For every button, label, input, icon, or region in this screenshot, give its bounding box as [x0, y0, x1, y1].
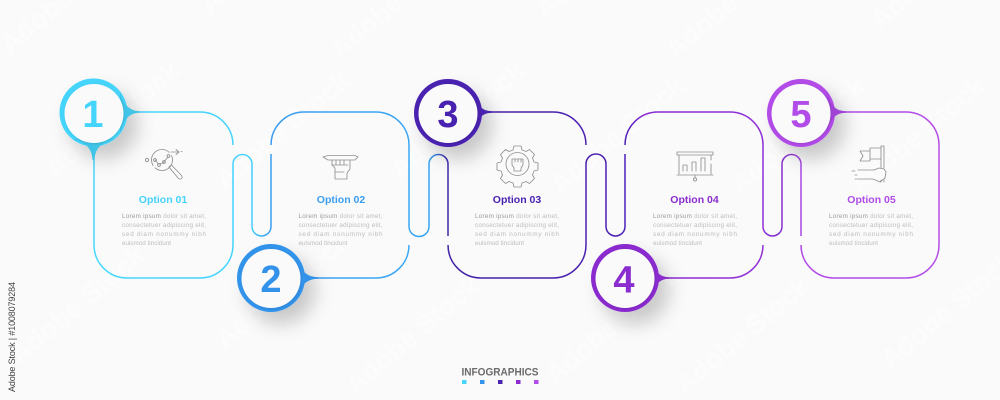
connector: 2 to 3 [409, 155, 448, 236]
panel: option 05 [801, 112, 939, 278]
footer title: INFOGRAPHICS [462, 366, 538, 378]
text block: option 05: euismod tincidunt [829, 240, 878, 247]
heading: option 01: Option 01 [139, 194, 187, 206]
icon: magnifier over chart [145, 150, 182, 179]
panel: option 03 [448, 112, 586, 278]
text block: option 04: sed diam nonummy nibh [653, 231, 737, 238]
watermark pattern: Adobe Stock [385, 55, 531, 185]
badge: number 1: 1 [82, 94, 104, 136]
badge: number 2: 2 [260, 259, 282, 301]
side stock id text: Adobe Stock | #1008079284 [7, 282, 17, 392]
badge: number 5: 5 [790, 94, 812, 136]
heading: option 02: Option 02 [317, 194, 365, 206]
text block: option 05: consectetuer adipiscing elit, [829, 222, 913, 229]
watermark pattern: Adobe Stock [545, 70, 691, 200]
text block: option 02: euismod tincidunt [298, 240, 348, 247]
badge: number 3: 3 [437, 94, 459, 136]
connector: 4 to 5 [763, 155, 801, 236]
text block: option 05: Lorem ipsum dolor sit amet, [829, 213, 913, 220]
panel: option 01 [94, 112, 233, 278]
icon: gear with fist [497, 146, 538, 187]
badge: number 4 [591, 244, 669, 312]
text block: option 02: sed diam nonummy nibh [298, 231, 383, 238]
watermark pattern: Adobe Stock [670, 270, 816, 400]
watermark pattern: Adobe Stock [210, 225, 356, 355]
footer colour legend [462, 380, 538, 384]
text block: option 01: Lorem ipsum dolor sit amet, [122, 213, 206, 220]
text block: option 02: consectetuer adipiscing elit, [298, 222, 383, 229]
badge: number 5 [767, 79, 846, 147]
text block: option 04: consectetuer adipiscing elit, [653, 222, 737, 229]
panel: option 04 [625, 112, 763, 278]
text block: option 03: consectetuer adipiscing elit, [475, 222, 559, 229]
badge: number 1 [60, 78, 139, 160]
watermark pattern: Adobe Stock [5, 240, 151, 370]
icon: hand holding flag [852, 146, 886, 182]
panel: option 02 [271, 112, 409, 278]
icon: presentation board [677, 152, 713, 181]
text block: option 03: sed diam nonummy nibh [475, 231, 559, 238]
text block: option 01: consectetuer adipiscing elit, [122, 222, 206, 229]
text block: option 04: euismod tincidunt [653, 240, 702, 247]
watermark pattern: Adobe Stock [845, 70, 991, 200]
heading: option 05: Option 05 [847, 194, 896, 206]
watermark pattern: Adobe Stock [725, 70, 871, 200]
watermark pattern: Adobe Stock [210, 65, 356, 195]
heading: option 04: Option 04 [670, 194, 719, 206]
connector: 3 to 4 [586, 154, 625, 236]
badge: number 2 [237, 244, 318, 312]
text block: option 03: Lorem ipsum dolor sit amet, [475, 213, 559, 220]
badge: number 4: 4 [613, 260, 635, 302]
watermark pattern: Adobe Stock [540, 260, 686, 390]
badge: number 3 [414, 79, 492, 147]
icon: fist with pencil [323, 156, 358, 179]
connector: 1 to 2 [233, 154, 271, 236]
text block: option 01: euismod tincidunt [122, 240, 171, 247]
text block: option 03: euismod tincidunt [475, 240, 524, 247]
watermark pattern: Adobe Stock [340, 270, 486, 400]
watermark pattern: Adobe Stock [40, 55, 186, 185]
text block: option 01: sed diam nonummy nibh [122, 231, 206, 238]
heading: option 03: Option 03 [493, 194, 541, 206]
text block: option 05: sed diam nonummy nibh [829, 231, 913, 238]
text block: option 02: Lorem ipsum dolor sit amet, [298, 213, 382, 220]
text block: option 04: Lorem ipsum dolor sit amet, [653, 213, 737, 220]
